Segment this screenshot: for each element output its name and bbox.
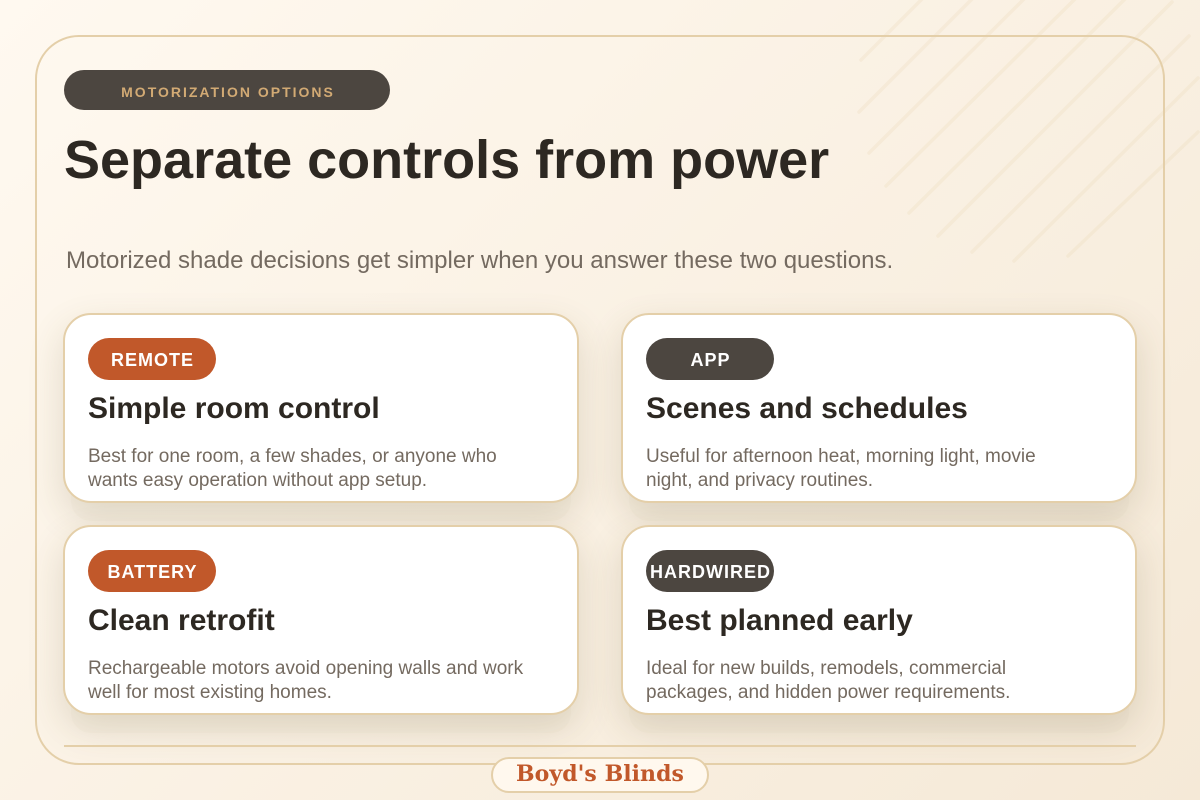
- card text: remote: wants easy operation without app setup.: [88, 470, 427, 491]
- card heading: battery: Clean retrofit: [88, 604, 275, 637]
- subtitle: Motorized shade decisions get simpler when you answer these two questions.: [66, 247, 893, 274]
- card text: battery: [88, 658, 524, 703]
- card text: remote: [88, 446, 497, 491]
- card heading: app: Scenes and schedules: [646, 392, 968, 425]
- footer rule: [64, 745, 1136, 747]
- card heading: hardwired: Best planned early: [646, 604, 913, 637]
- tag: app: APP: [690, 350, 730, 370]
- card: app: [621, 313, 1137, 503]
- card text: hardwired: Ideal for new builds, remodels, commercial: [646, 658, 1006, 679]
- brand badge: [491, 757, 709, 793]
- card text: battery: well for most existing homes.: [88, 682, 332, 703]
- card text: hardwired: [646, 658, 1010, 703]
- card heading: remote: Simple room control: [88, 392, 380, 425]
- tag: remote: [88, 338, 216, 380]
- card: remote: [63, 313, 579, 503]
- tag: hardwired: HARDWIRED: [650, 562, 771, 582]
- title: Separate controls from power: [64, 130, 829, 190]
- tag: remote: REMOTE: [111, 350, 194, 370]
- tag: battery: [88, 550, 216, 592]
- card text: remote: Best for one room, a few shades, or anyone who: [88, 446, 497, 467]
- card text: app: night, and privacy routines.: [646, 470, 873, 491]
- card text: hardwired: packages, and hidden power requirements.: [646, 682, 1010, 703]
- card text: app: [646, 446, 1036, 491]
- card text: battery: Rechargeable motors avoid opening walls and work: [88, 658, 523, 679]
- eyebrow pill: [64, 70, 390, 110]
- tag: hardwired: [646, 550, 774, 592]
- tag: app: [646, 338, 774, 380]
- tag: battery: BATTERY: [108, 562, 198, 582]
- brand badge: Boyd's Blinds: [516, 761, 684, 787]
- eyebrow pill: MOTORIZATION OPTIONS: [121, 84, 335, 100]
- card: hardwired: [621, 525, 1137, 715]
- card: battery: [63, 525, 579, 715]
- card text: app: Useful for afternoon heat, morning light, movie: [646, 446, 1036, 467]
